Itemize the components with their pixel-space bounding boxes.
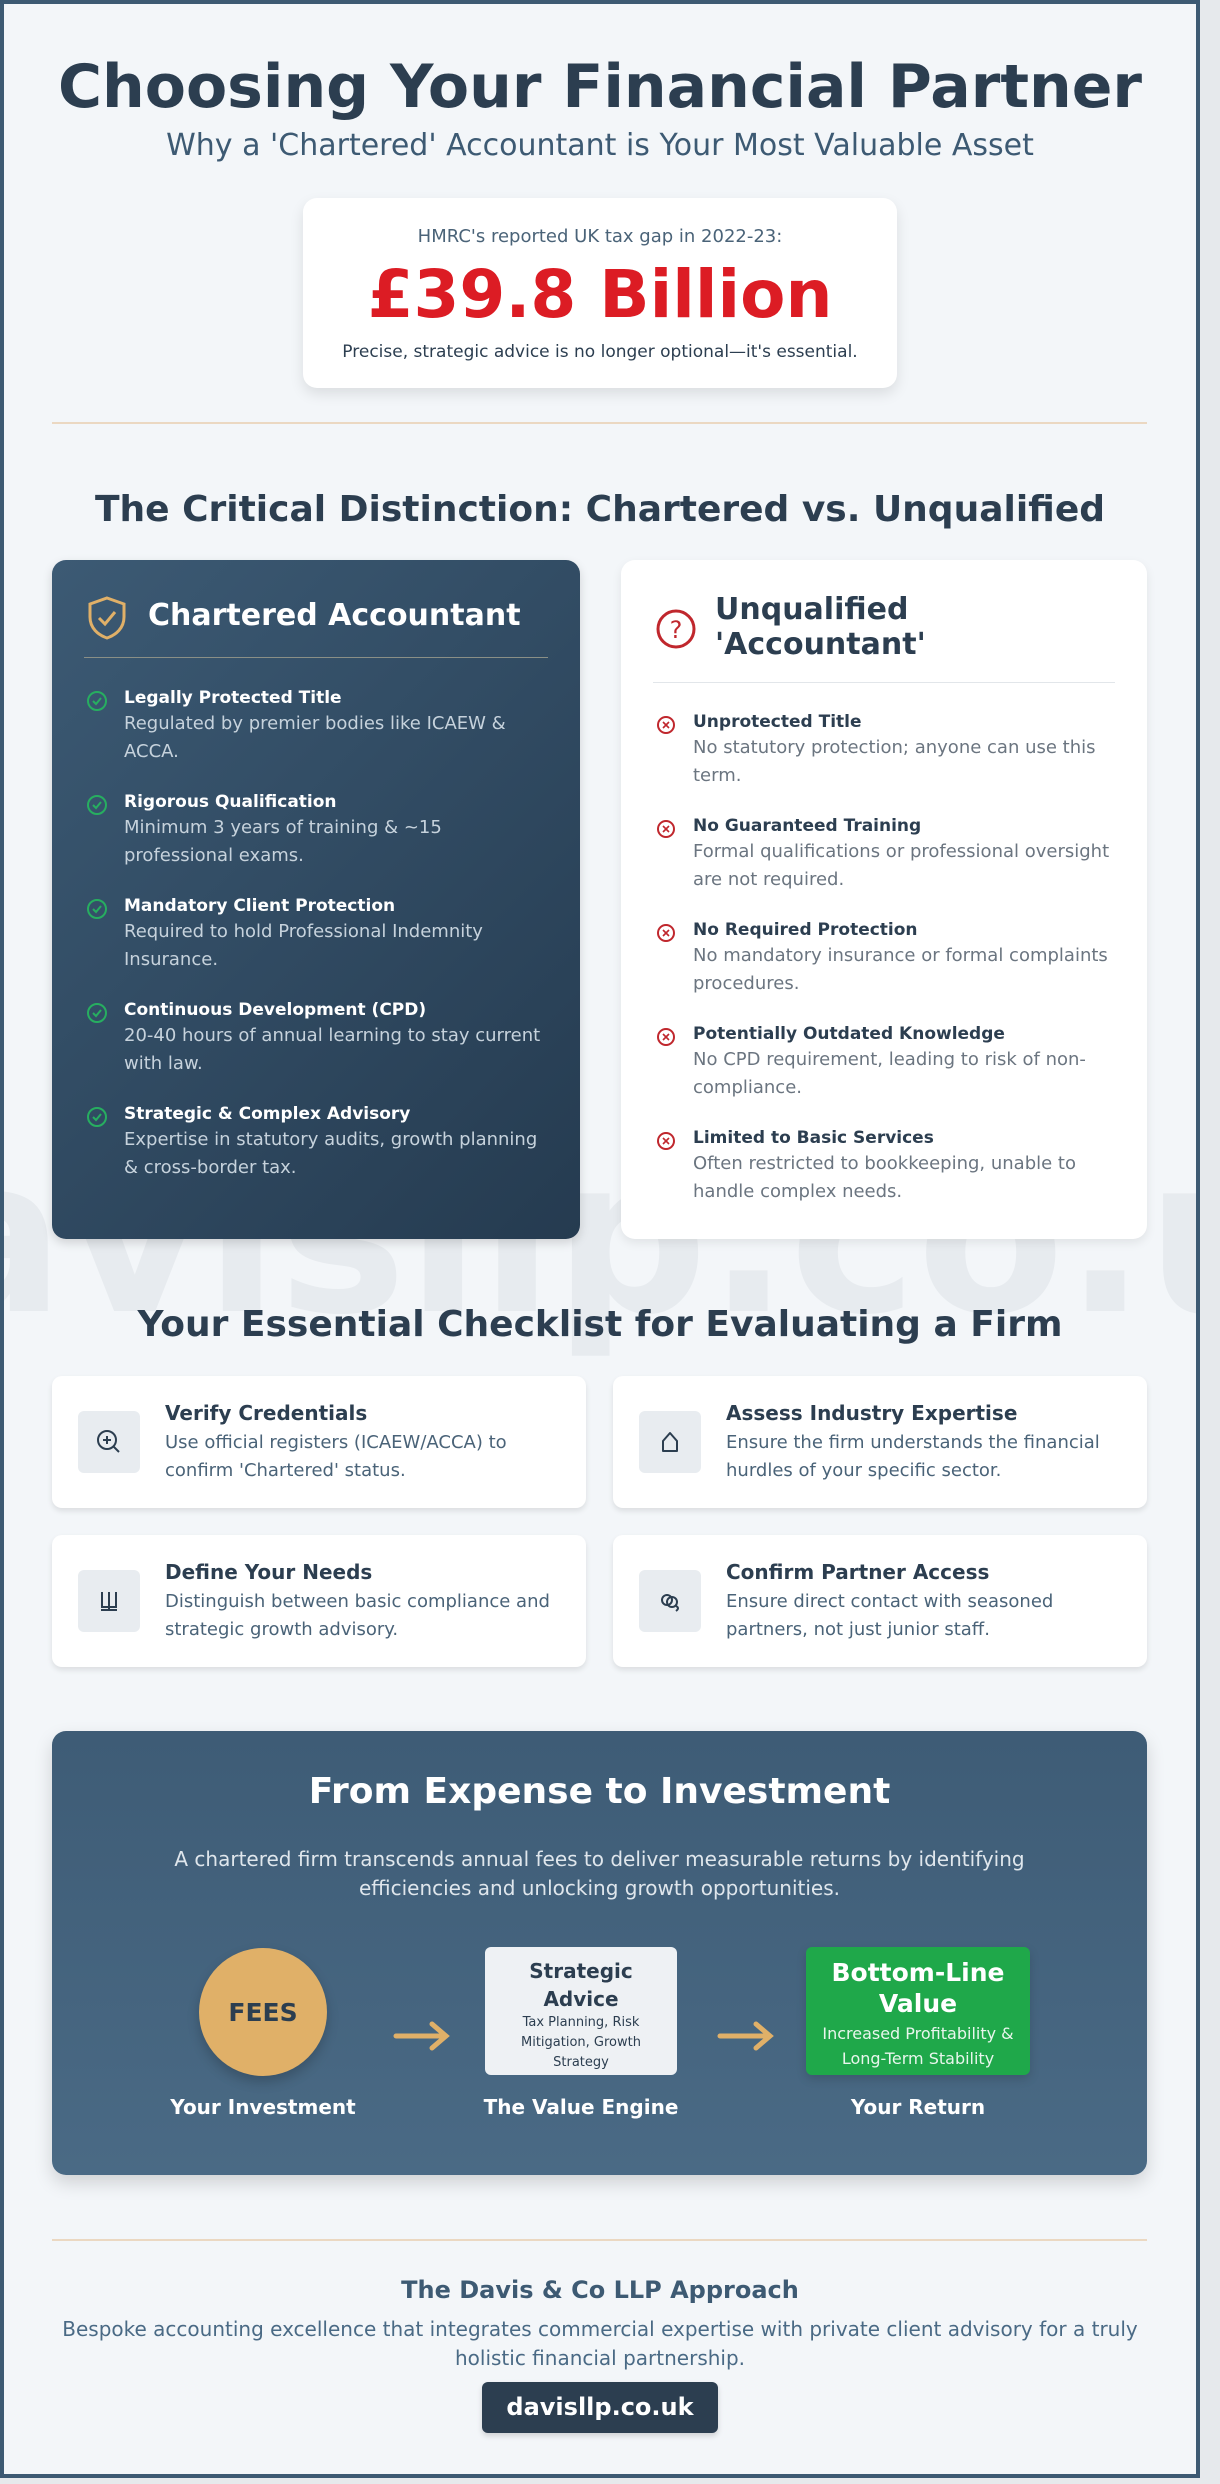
arrow 1 [394, 2022, 450, 2050]
list of chartered items: Strategic & Complex Advisory [124, 1104, 410, 1124]
flow: fees circle: FEES [228, 1998, 298, 2026]
list of unqualified items: Limited to Basic Services [693, 1128, 934, 1148]
checklist card: industry expertise [613, 1376, 1147, 1508]
label: value engine: The Value Engine [484, 2095, 678, 2119]
flow: strategic advice box: Advice [543, 1987, 619, 2011]
stat value: £39.8 Billion [368, 256, 832, 333]
label: your investment: Your Investment [170, 2095, 356, 2119]
list of chartered items: 20-40 hours of annual learning to stay current with law. [124, 1025, 540, 1074]
list of chartered items: Regulated by premier bodies like ICAEW & ACCA. [124, 713, 506, 762]
icon: question: ? [670, 616, 682, 644]
website button: davisllp.co.uk [506, 2393, 694, 2421]
stat label: HMRC's reported UK tax gap in 2022-23: [418, 226, 782, 247]
checklist card: partner access [613, 1535, 1147, 1667]
list of chartered items: Continuous Development (CPD) [124, 1000, 426, 1020]
panel heading: From Expense to Investment [309, 1771, 890, 1812]
checklist card: verify credentials: Use official registers (ICAEW/ACCA) to confirm 'Chartered' status. [165, 1432, 507, 1481]
panel heading [715, 592, 926, 662]
panel description: A chartered firm transcends annual fees to deliver measurable returns by identifying efficiencies and unlocking growth opportunities. [174, 1847, 1025, 1900]
panel heading: Chartered Accountant [148, 598, 521, 633]
panel heading: Unqualified [715, 592, 908, 627]
checklist card: define needs: Distinguish between basic compliance and strategic growth advisory. [165, 1591, 550, 1640]
list of unqualified items: Formal qualifications or professional oversight are not required. [693, 841, 1109, 890]
flow: strategic advice box [485, 1947, 677, 2075]
checklist card: industry expertise: Ensure the firm understands the financial hurdles of your specific sector. [726, 1432, 1100, 1481]
flow: strategic advice box: Tax Planning, Risk Mitigation, Growth Strategy [521, 2015, 641, 2070]
panel: chartered accountant [52, 560, 580, 1239]
panel: unqualified accountant [621, 560, 1147, 1239]
flow: strategic advice box: Strategic [529, 1959, 633, 1983]
flow: bottom-line value box: Increased Profitability & Long-Term Stability [822, 2024, 1014, 2068]
footer text: Bespoke accounting excellence that integrates commercial expertise with private client advisory for a truly holistic financial partnership. [62, 2317, 1138, 2370]
heading: checklist: Your Essential Checklist for Evaluating a Firm [137, 1304, 1062, 1345]
list of chartered items: Legally Protected Title [124, 688, 342, 708]
checklist card: define needs: Define Your Needs [165, 1560, 372, 1584]
flow: bottom-line value box: Value [879, 1989, 957, 2018]
flow: fees circle [199, 1948, 327, 2076]
icon: fork [78, 1570, 140, 1632]
stat caption: Precise, strategic advice is no longer optional—it's essential. [342, 342, 858, 362]
flow: bottom-line value box [806, 1947, 1030, 2075]
flow: bottom-line value box: Bottom-Line [832, 1958, 1004, 1987]
icon: house [639, 1411, 701, 1473]
subtitle: Why a 'Chartered' Accountant is Your Most Valuable Asset [166, 128, 1034, 163]
website button [482, 2382, 718, 2433]
list of unqualified items: No statutory protection; anyone can use this term. [693, 737, 1096, 786]
icon: question [656, 610, 696, 648]
list of chartered items: Rigorous Qualification [124, 792, 337, 812]
list of unqualified items: No mandatory insurance or formal complaints procedures. [693, 945, 1108, 994]
list of unqualified items: No Required Protection [693, 920, 918, 940]
list of chartered items [87, 688, 540, 1178]
list of unqualified items: Often restricted to bookkeeping, unable to handle complex needs. [693, 1153, 1076, 1202]
checklist card: industry expertise: Assess Industry Expertise [726, 1401, 1017, 1425]
list of unqualified items: Unprotected Title [693, 712, 862, 732]
arrow 2 [718, 2022, 774, 2050]
list of unqualified items: No Guaranteed Training [693, 816, 921, 836]
list of unqualified items [657, 712, 1109, 1202]
icon: link [639, 1570, 701, 1632]
checklist card: define needs [52, 1535, 586, 1667]
checklist card: partner access: Confirm Partner Access [726, 1560, 989, 1584]
panel heading: 'Accountant' [715, 627, 926, 662]
checklist card: verify credentials [52, 1376, 586, 1508]
label: your return: Your Return [851, 2095, 985, 2119]
list of chartered items: Minimum 3 years of training & ~15 professional exams. [124, 817, 442, 866]
list of chartered items: Mandatory Client Protection [124, 896, 395, 916]
checklist card: verify credentials: Verify Credentials [165, 1401, 367, 1425]
list of unqualified items: No CPD requirement, leading to risk of non-compliance. [693, 1049, 1086, 1098]
list of chartered items: Required to hold Professional Indemnity Insurance. [124, 921, 483, 970]
list of chartered items: Expertise in statutory audits, growth planning & cross-border tax. [124, 1129, 537, 1178]
list of unqualified items: Potentially Outdated Knowledge [693, 1024, 1005, 1044]
title: Choosing Your Financial Partner [58, 52, 1142, 122]
checklist card: partner access: Ensure direct contact with seasoned partners, not just junior staff. [726, 1591, 1053, 1640]
stat card: tax gap [303, 198, 897, 388]
heading: critical distinction: The Critical Distinction: Chartered vs. Unqualified [95, 489, 1105, 530]
footer heading: The Davis & Co LLP Approach [401, 2276, 799, 2304]
icon: magnifier [78, 1411, 140, 1473]
icon: shield [88, 596, 126, 640]
panel: expense to investment [52, 1731, 1147, 2175]
